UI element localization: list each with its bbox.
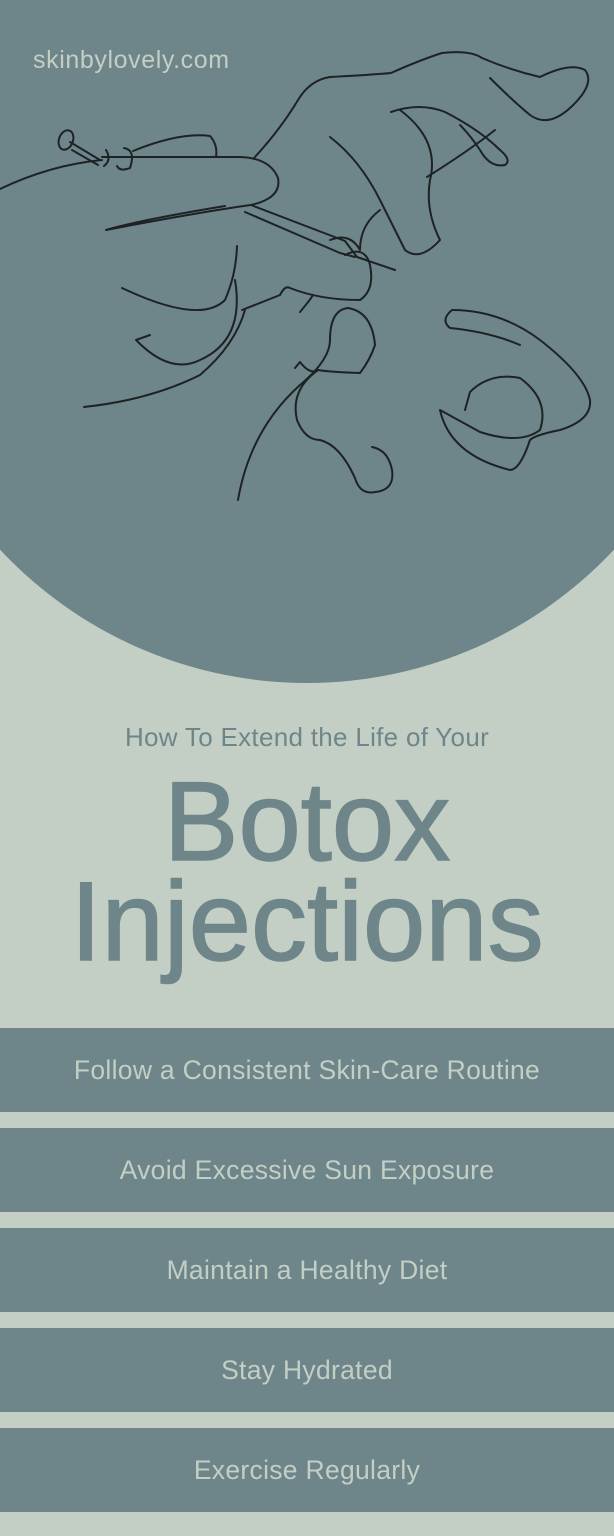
line art: hands with syringe [0, 52, 590, 500]
main title: Botox [164, 759, 450, 884]
header circle with line art [0, 0, 614, 683]
tip 5 [0, 1428, 614, 1512]
tip 5: Exercise Regularly [194, 1455, 420, 1485]
tip 2: Avoid Excessive Sun Exposure [120, 1155, 494, 1185]
tip 1 [0, 1028, 614, 1112]
tip 1: Follow a Consistent Skin-Care Routine [74, 1055, 540, 1085]
tip 3 [0, 1228, 614, 1312]
title block: Injections [70, 859, 544, 984]
title block [70, 722, 544, 984]
site url: skinbylovely.com [33, 46, 230, 74]
tip 3: Maintain a Healthy Diet [167, 1255, 447, 1285]
background circle [0, 0, 614, 683]
tip 4 [0, 1328, 614, 1412]
tips list [0, 1028, 614, 1512]
tip 4: Stay Hydrated [221, 1355, 393, 1385]
subtitle: How To Extend the Life of Your [125, 722, 489, 752]
tip 2 [0, 1128, 614, 1212]
